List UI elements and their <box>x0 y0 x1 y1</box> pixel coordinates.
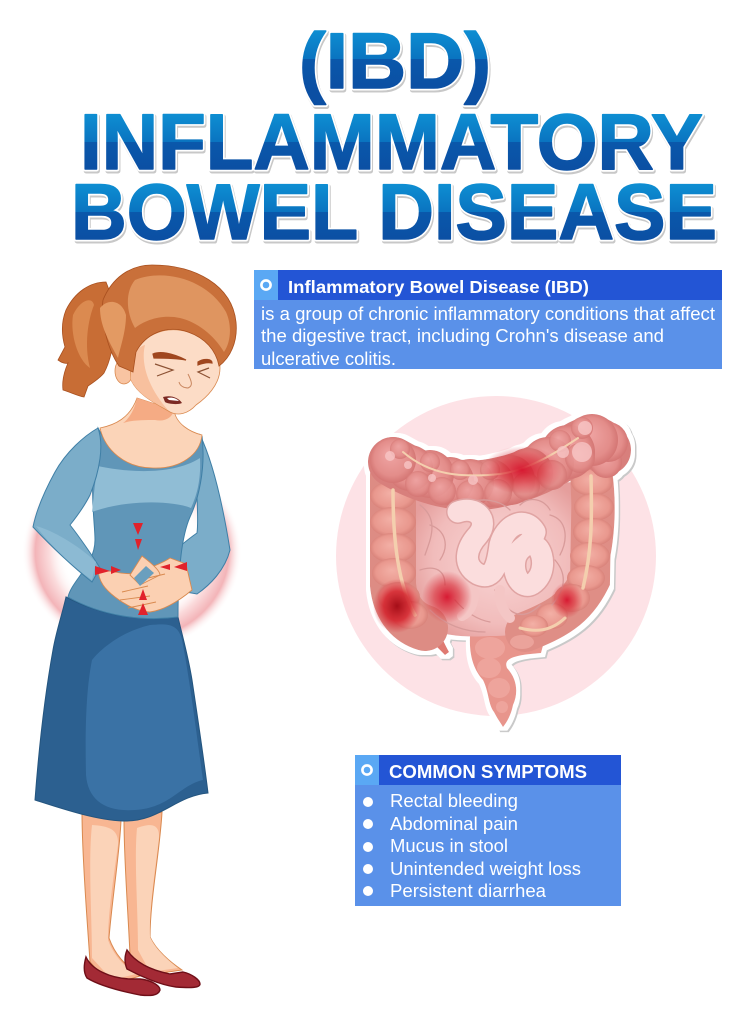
ear <box>115 358 133 384</box>
panel: IBD definition <box>254 270 722 369</box>
definition text: the digestive tract, including Crohn's disease and <box>261 326 664 346</box>
red pain arrows <box>95 523 187 615</box>
rectum <box>470 628 546 727</box>
skirt highlight <box>86 624 203 810</box>
title line: BOWEL DISEASE: BOWEL DISEASE <box>71 167 717 256</box>
chest highlight <box>92 458 200 512</box>
title <box>71 16 718 258</box>
small intestine base <box>412 482 574 636</box>
illustration: colon on pink circle <box>336 396 656 727</box>
pink circle <box>336 396 656 716</box>
left cuff shading <box>36 526 96 580</box>
skirt <box>35 597 208 821</box>
rectum folds <box>475 635 534 713</box>
bump highlights <box>385 421 592 485</box>
symptom list: Mucus in stool <box>390 836 508 856</box>
hair main <box>102 265 236 372</box>
panel: common symptoms <box>355 755 621 906</box>
legs <box>82 812 182 985</box>
hair highlights <box>128 275 230 352</box>
icon: header ring <box>261 280 271 290</box>
hands <box>98 556 192 612</box>
shoe: left <box>84 957 160 995</box>
title line: (IBD): (IBD) <box>299 16 491 105</box>
title line: (IBD): (IBD) <box>299 16 491 105</box>
mouth <box>163 396 182 404</box>
heading: IBD: Inflammatory Bowel Disease (IBD) <box>288 277 589 297</box>
title line: INFLAMMATORY: INFLAMMATORY <box>80 97 703 186</box>
hair back and ponytail <box>58 282 114 397</box>
face shade <box>131 345 168 410</box>
title line: BOWEL DISEASE: BOWEL DISEASE <box>72 169 718 258</box>
neck and chest <box>100 398 202 468</box>
heading: common symptoms: COMMON SYMPTOMS <box>389 762 587 782</box>
ascending colon <box>370 475 428 629</box>
nose <box>179 374 191 388</box>
transverse colon <box>370 414 628 508</box>
symptom list: Abdominal pain <box>390 814 518 834</box>
inflamed areas <box>373 446 583 633</box>
definition text <box>261 304 715 369</box>
illustration: woman with abdominal pain <box>22 265 242 995</box>
symptom list: Unintended weight loss <box>390 859 581 879</box>
left arm <box>33 428 101 582</box>
pain glow <box>22 452 242 652</box>
right arm <box>168 435 230 594</box>
eyes <box>155 364 210 378</box>
shoe: right <box>125 950 200 988</box>
mesentery bands <box>393 438 591 630</box>
symptom list: Rectal bleeding <box>390 791 518 811</box>
definition text: ulcerative colitis. <box>261 349 396 369</box>
torso <box>68 428 203 619</box>
neck shadow <box>123 398 174 423</box>
symptom list <box>363 791 581 901</box>
small intestine loops <box>420 500 565 632</box>
appendix <box>420 616 449 655</box>
title line: BOWEL DISEASE: BOWEL DISEASE <box>71 167 717 256</box>
title line: INFLAMMATORY: INFLAMMATORY <box>80 97 703 186</box>
title line: INFLAMMATORY: INFLAMMATORY <box>81 99 704 188</box>
face <box>130 330 220 414</box>
title line: (IBD): (IBD) <box>300 18 492 107</box>
descending colon <box>520 468 615 637</box>
icon: header ring <box>362 765 372 775</box>
eyebrows <box>153 353 212 365</box>
definition text: is a group of chronic inflammatory conditions that affect <box>261 304 715 324</box>
colon and intestines <box>370 414 628 727</box>
symptom list: Persistent diarrhea <box>390 881 547 901</box>
